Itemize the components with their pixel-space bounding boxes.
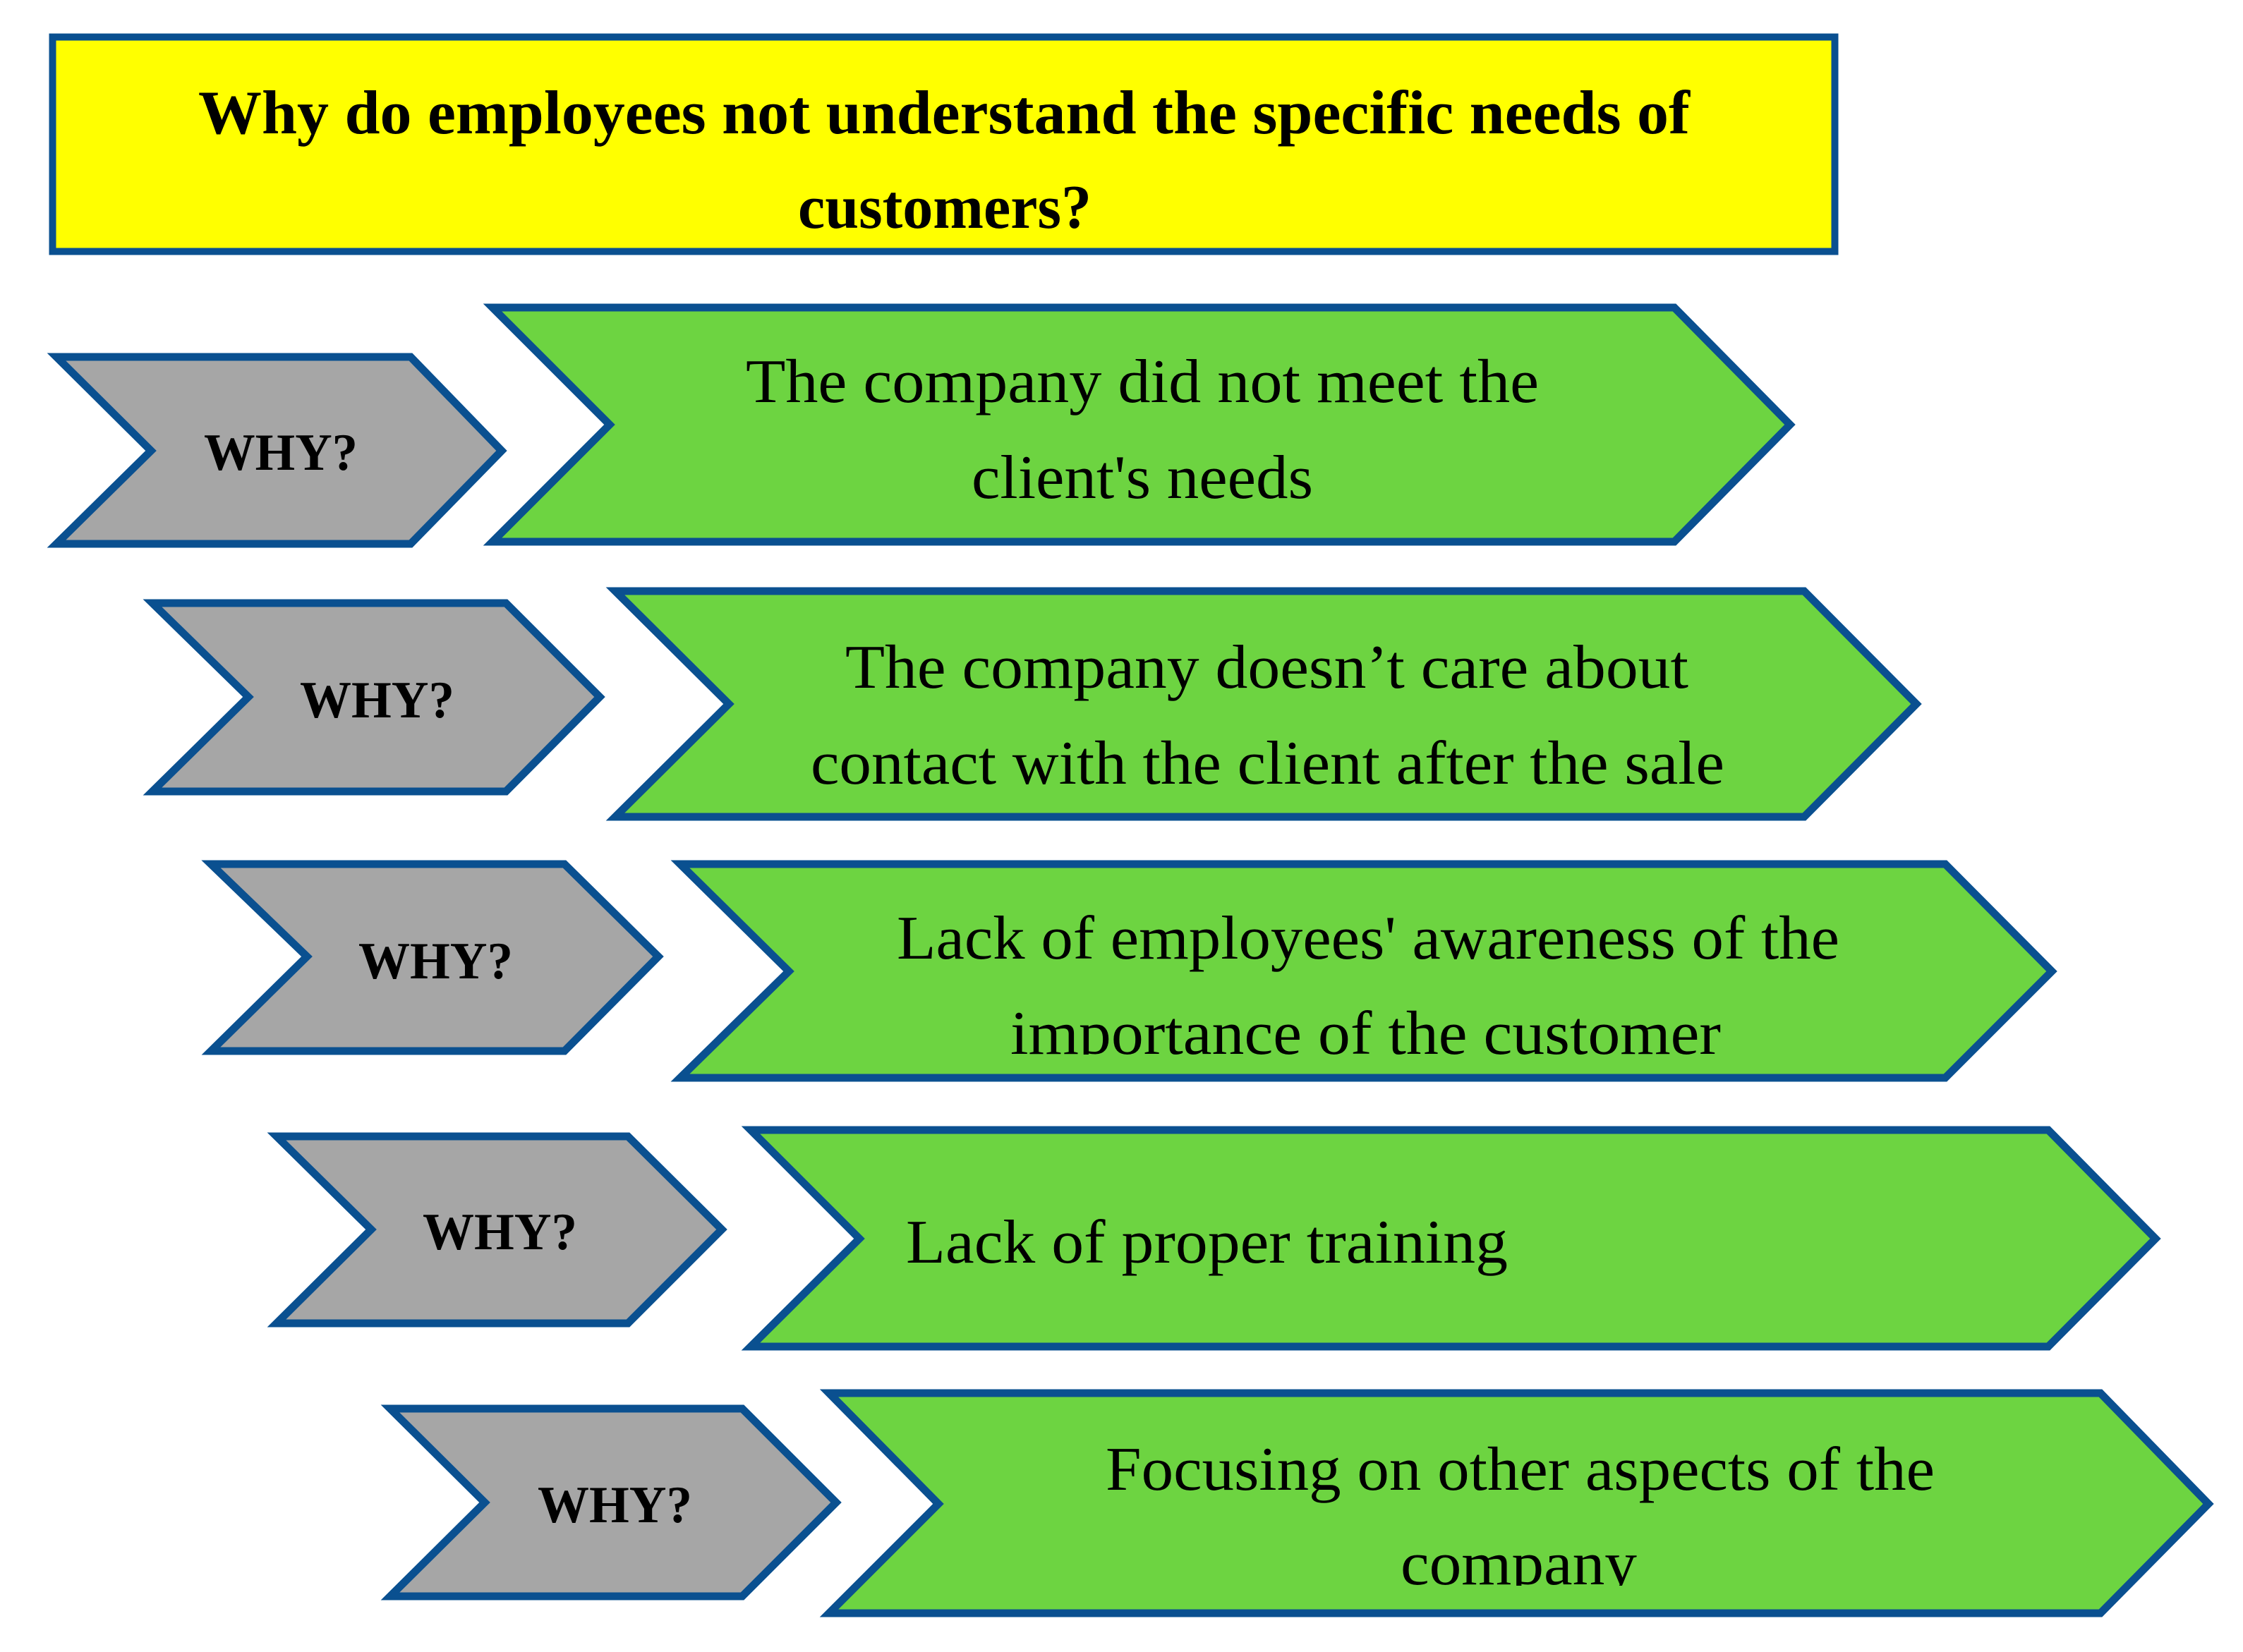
row 4: why arrow <box>277 1136 722 1323</box>
row 2: answer arrow <box>615 591 1916 817</box>
row 3: why arrow <box>211 864 658 1051</box>
row 5: answer arrow <box>829 1393 2208 1613</box>
row 1: answer arrow <box>492 308 1790 542</box>
title text: Why do employees not understand the specific needs of <box>198 79 1691 147</box>
answer text 5: Focusing on other aspects of the <box>1106 1435 1935 1504</box>
answer text 2: contact with the client after the sale <box>811 729 1724 798</box>
row 2: why arrow <box>152 603 600 791</box>
label: why 3: WHY? <box>358 933 513 990</box>
answer text 3: Lack of employees' awareness of the <box>897 904 1839 973</box>
answer text 3: importance of the customer <box>1010 1000 1721 1068</box>
answer text 2: The company doesn’t care about <box>845 633 1688 702</box>
label: why 2: WHY? <box>300 672 454 729</box>
answer text 1: The company did not meet the <box>746 348 1539 416</box>
answer text 4: Lack of proper training <box>906 1208 1508 1277</box>
title text: customers? <box>798 174 1092 242</box>
row 1: why arrow <box>56 357 502 544</box>
title box <box>52 37 1834 251</box>
row 3: answer arrow <box>680 864 2052 1078</box>
answer text 1: client's needs <box>972 444 1313 512</box>
answer text 5: company <box>1401 1530 1637 1598</box>
row 5: why arrow <box>390 1409 836 1596</box>
row 4: answer arrow <box>751 1130 2156 1347</box>
label: why 1: WHY? <box>204 424 358 482</box>
label: why 5: WHY? <box>538 1476 692 1534</box>
label: why 4: WHY? <box>423 1203 577 1261</box>
